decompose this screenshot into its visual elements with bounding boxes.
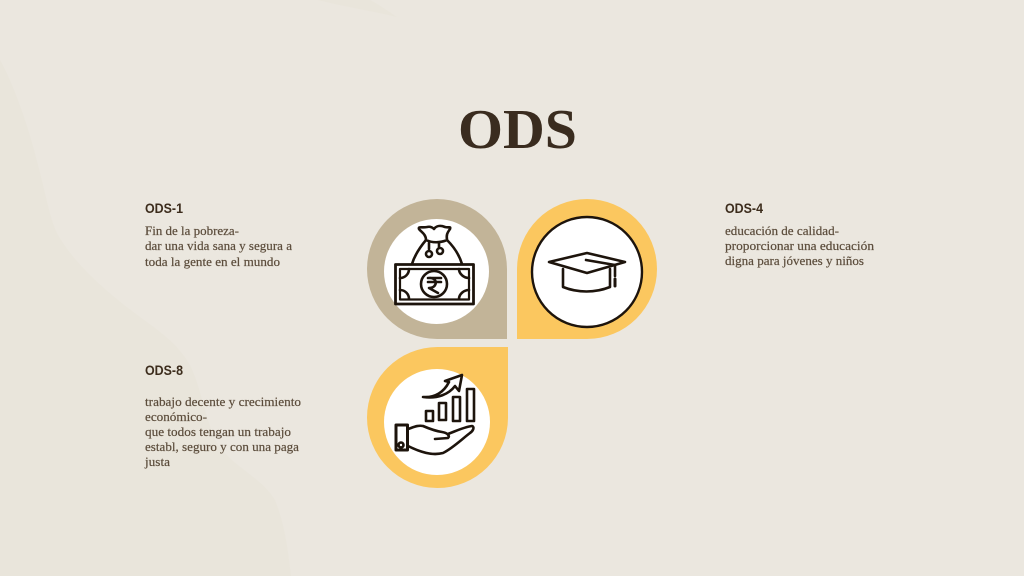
text block: ODS-8: justa [144,455,170,469]
text block: ODS-1: dar una vida sana y segura a [145,239,292,253]
text block: ODS-8: trabajo decente y crecimiento [145,395,301,409]
panel: education drop [517,199,657,339]
panel: growth drop [367,347,508,488]
text block: ODS-8: que todos tengan un trabajo [145,425,291,439]
title: ODS [458,99,577,161]
text block: ODS-4: digna para jóvenes y niños [725,254,864,268]
text block: ODS-1: toda la gente en el mundo [145,255,280,269]
text block: ODS-4: educación de calidad- [725,224,839,238]
text block: ODS-8: establ, seguro y con una paga [145,440,299,454]
icon: graduation cap [549,253,625,292]
text block: ODS-4: ODS-4 [725,200,763,216]
text block: ODS-8: económico- [145,410,207,424]
panel: money drop [367,199,507,339]
text block: ODS-1 [145,200,292,269]
text block: ODS-4: proporcionar una educación [725,239,875,253]
icon: hand holding rising bar chart [396,375,474,454]
text block: ODS-1: Fin de la pobreza- [145,224,239,238]
text block: ODS-8: ODS-8 [145,362,183,378]
text block: ODS-1: ODS-1 [145,200,183,216]
icon: money bag and rupee banknote [396,226,474,304]
text block: ODS-8 [144,362,301,469]
text block: ODS-4 [725,200,875,268]
